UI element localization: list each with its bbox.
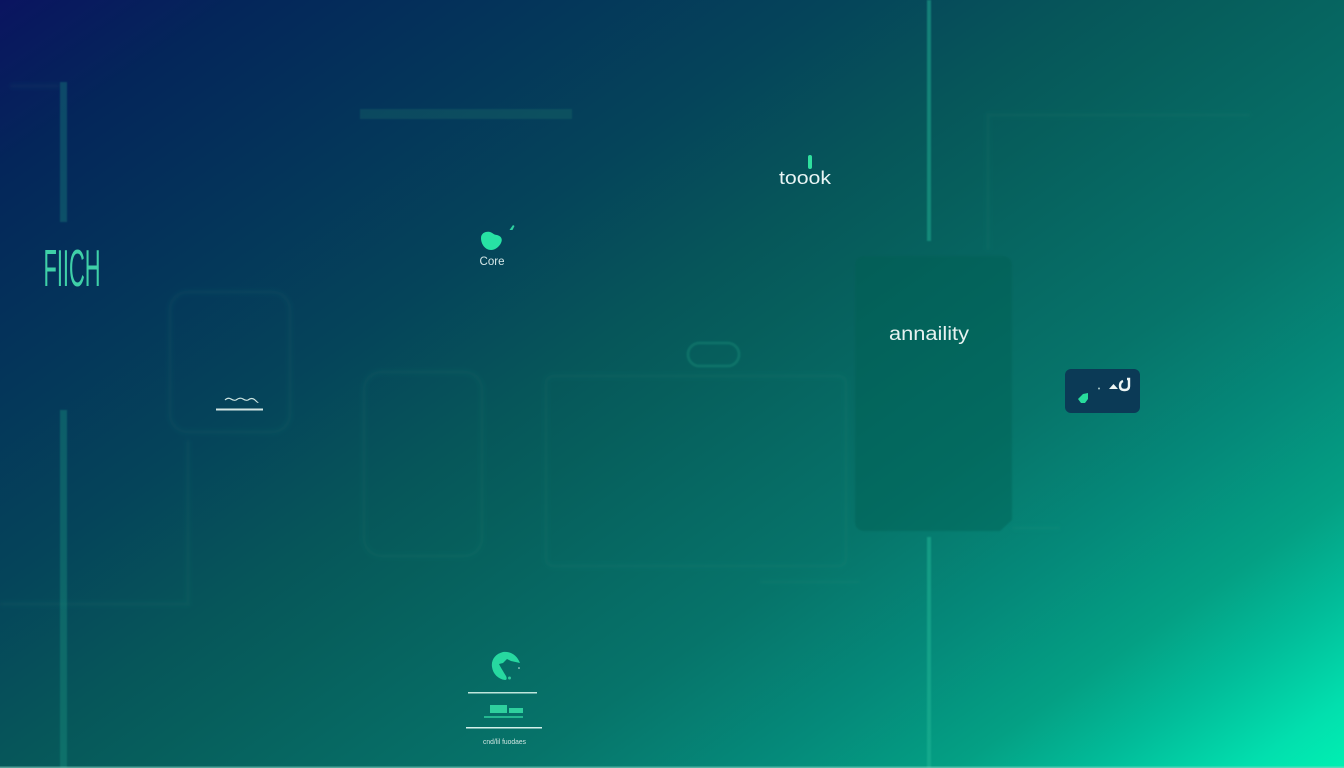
icon: green blob (481, 232, 502, 250)
vertical rule: left lower (60, 410, 67, 768)
icon: white hook (1120, 379, 1129, 390)
badge: dark card with icons (1065, 369, 1140, 413)
vertical rule: left upper (60, 82, 67, 222)
icon: green bars (484, 705, 523, 718)
faint pill outline (688, 343, 739, 366)
faint horizontal bar (360, 109, 572, 119)
title: FIICH: FIICH (44, 240, 101, 298)
faint central panel (855, 256, 1012, 531)
icon: vertical pill (808, 155, 812, 169)
label: Core: Core (480, 256, 504, 268)
rule upper (468, 692, 537, 694)
vertical rule: right upper (927, 0, 931, 241)
icon: green leaf (1078, 393, 1088, 403)
bottom edge strip (0, 766, 1344, 768)
toook label with marker (779, 155, 832, 188)
label: annaility: annaility (889, 324, 970, 345)
icon: globe (492, 652, 520, 680)
caption: cnd/lil fuodaes (483, 737, 526, 746)
label: toook: toook (779, 168, 832, 188)
icon: white triangle (1109, 384, 1118, 389)
vertical rule: right lower (927, 537, 931, 768)
icon: wave with underline (216, 398, 263, 410)
rule lower (466, 727, 542, 728)
bottom legend group (466, 652, 542, 746)
core label with icon (480, 225, 514, 268)
faint background frames and panels (0, 86, 1250, 604)
icon: small leaf (510, 225, 514, 230)
